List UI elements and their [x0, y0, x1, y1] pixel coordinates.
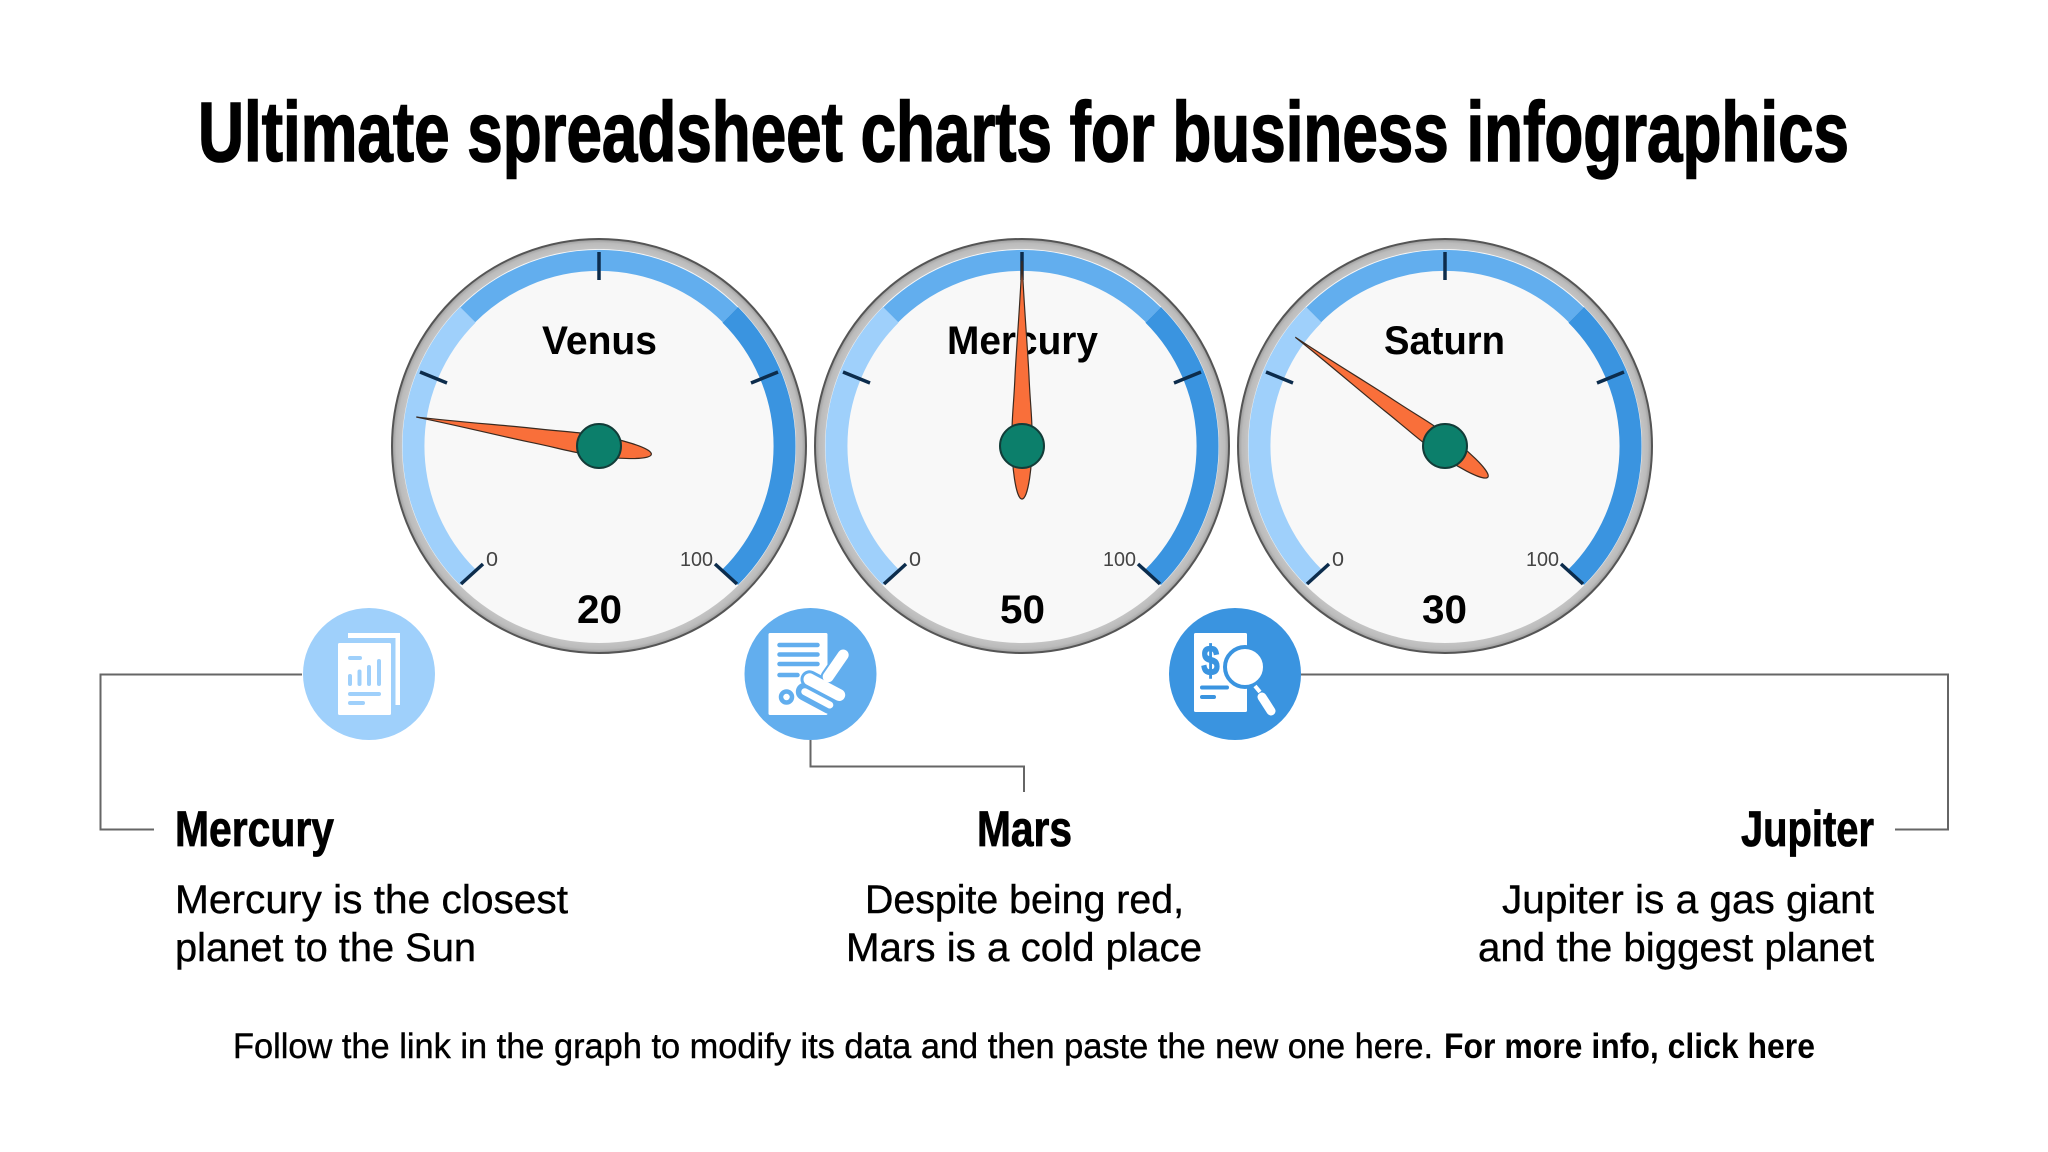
gauge: Mercury 50: 0	[909, 549, 921, 571]
icon: report document with bar chart	[303, 608, 435, 740]
gauge: Mercury 50	[815, 239, 1229, 653]
text block: Mercury: planet to the Sun	[175, 926, 476, 970]
gauge: Venus 20	[392, 239, 806, 653]
footer note: Follow the link in the graph to modify its data and then paste the new one here.	[233, 1027, 1433, 1066]
icon: document with brush	[744, 608, 876, 740]
gauge: Venus 20: 100	[680, 549, 713, 571]
icon: invoice with magnifier	[1169, 608, 1301, 740]
gauge: Saturn 30: Saturn	[1384, 319, 1505, 363]
gauge: Mercury 50: 100	[1103, 549, 1136, 571]
gauge: Venus 20: 20	[577, 588, 622, 632]
connector: right	[1301, 674, 1948, 830]
gauge: Saturn 30: 100	[1526, 549, 1559, 571]
text block: Jupiter: Jupiter is a gas giant	[1502, 878, 1874, 922]
text block: Jupiter	[1478, 801, 1874, 970]
footer note: For more info, click here	[1444, 1027, 1815, 1066]
gauge: Saturn 30: 0	[1332, 549, 1344, 571]
text block: Mercury: Mercury is the closest	[175, 878, 568, 922]
text block: Mercury: Mercury	[175, 801, 334, 857]
gauge: Saturn 30: 30	[1422, 588, 1467, 632]
gauge: Mercury 50: 50	[1000, 588, 1045, 632]
icon: invoice with magnifier: $	[1202, 637, 1220, 684]
gauge: Saturn 30	[1238, 239, 1652, 653]
text block: Mars: Mars is a cold place	[846, 926, 1202, 970]
gauge: Venus 20: 0	[486, 549, 498, 571]
gauge: Venus 20: Venus	[542, 319, 657, 363]
connector: middle	[810, 740, 1024, 792]
text block: Mars: Mars	[977, 801, 1072, 857]
text block: Jupiter: and the biggest planet	[1478, 926, 1874, 970]
text block: Mars: Despite being red,	[865, 878, 1184, 922]
text block: Mercury	[175, 801, 568, 970]
gauge: Mercury 50: Mercury	[947, 319, 1099, 363]
text block: Jupiter: Jupiter	[1741, 801, 1874, 857]
text block: Mars	[846, 801, 1202, 970]
connector: left	[100, 674, 302, 830]
